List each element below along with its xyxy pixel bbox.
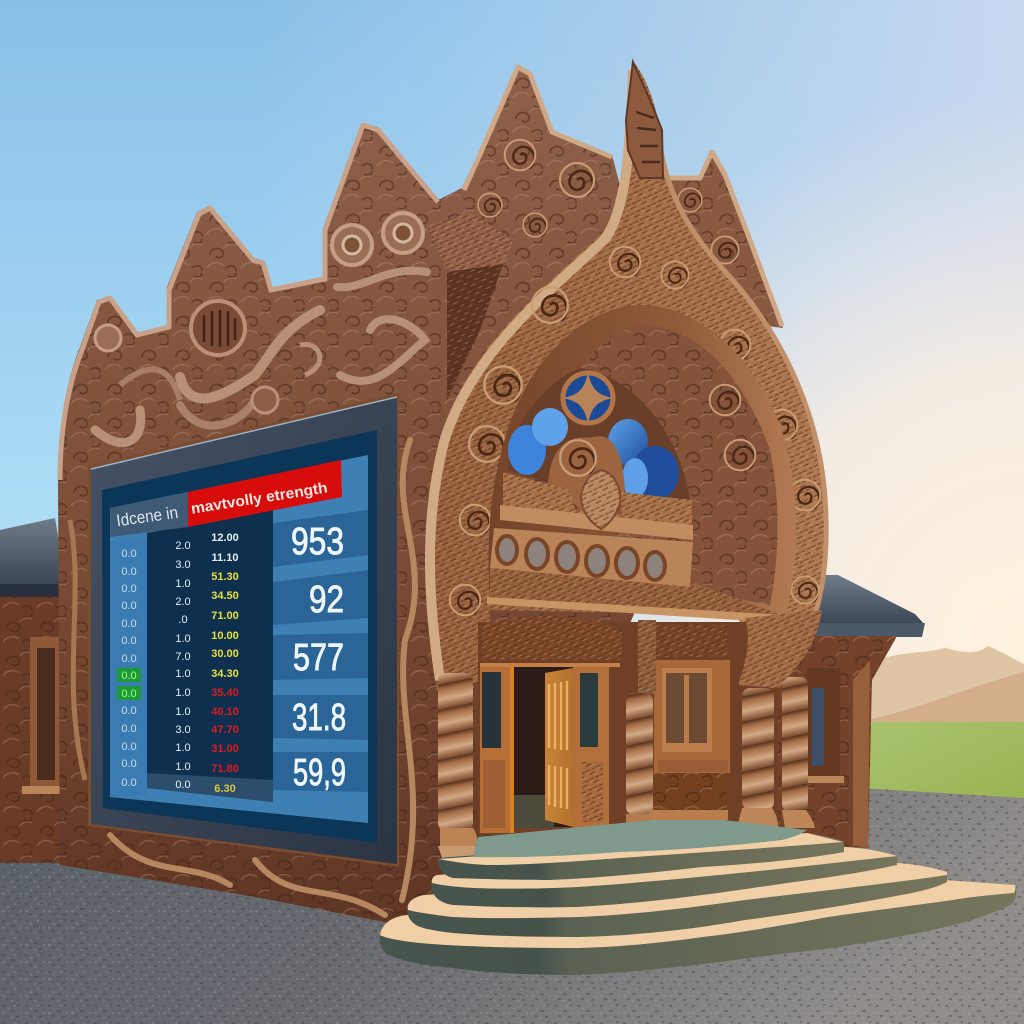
screen: second data column: 30.00 bbox=[211, 648, 239, 660]
background: grass field bbox=[862, 722, 1024, 799]
facade relief: medallions and ribbons bbox=[95, 213, 427, 443]
screen: second data column: 11.10 bbox=[212, 552, 238, 564]
arch: smooth left moulding bbox=[430, 70, 633, 680]
door: open leaf bbox=[545, 668, 573, 827]
screen: large values: 59,9 bbox=[293, 752, 346, 794]
screen: id column values: 0.0 bbox=[121, 653, 137, 665]
screen: id column values: 0.0 bbox=[121, 635, 137, 647]
screen: second data column: 35.40 bbox=[211, 687, 239, 699]
screen: second data column: 12.00 bbox=[211, 532, 239, 544]
twisted columns bbox=[438, 620, 815, 858]
central gable with swirls bbox=[464, 67, 612, 237]
screen: large values: 31.8 bbox=[292, 697, 346, 739]
screen: summary row bbox=[147, 773, 273, 802]
alcove interior bbox=[488, 305, 796, 618]
right gable bbox=[650, 150, 783, 328]
screen: inner dark edge bbox=[102, 430, 377, 843]
screen: id column values: 0.0 bbox=[121, 583, 137, 595]
right wing: roof bbox=[815, 575, 925, 637]
display screen bbox=[88, 393, 399, 867]
screen: second data column: 34.30 bbox=[211, 668, 239, 680]
screen: first data column: 1.0 bbox=[175, 687, 191, 699]
screen: red header bar: mavtvolly etrength bbox=[190, 479, 329, 518]
screen: first data column: 0.0 bbox=[175, 779, 191, 791]
great arch: carved ring bbox=[426, 60, 828, 690]
main carved facade bbox=[58, 65, 650, 925]
arch: right edge moulding bbox=[658, 130, 826, 686]
screen: large values: 953 bbox=[291, 521, 344, 563]
step: top tier bbox=[438, 833, 844, 880]
screen: id column values: 0.0 bbox=[121, 688, 137, 700]
screen: large values bbox=[291, 521, 346, 794]
door: left leaf bbox=[480, 667, 513, 833]
step: bottom tier bbox=[380, 880, 1016, 975]
screen: first data column: 1.0 bbox=[175, 706, 191, 718]
carved balcony bbox=[487, 472, 784, 623]
heart shield ornament bbox=[581, 470, 620, 529]
screen: bezel bbox=[88, 393, 399, 867]
screen: second data column: 6.30 bbox=[214, 783, 236, 795]
screen: id column values: 0.0 bbox=[121, 670, 137, 682]
screen: large values: 92 bbox=[309, 579, 344, 621]
screen: header cell bbox=[110, 492, 188, 537]
screen: second data column: 40.10 bbox=[211, 706, 239, 718]
screen: id column values: 0.0 bbox=[121, 741, 137, 753]
screen: id column values: 0.0 bbox=[121, 548, 137, 560]
screen: first data column: 1.0 bbox=[175, 742, 191, 754]
left wing: carved wall and window bbox=[0, 597, 70, 863]
carved tower capital bbox=[427, 212, 513, 400]
screen: second data column: 34.50 bbox=[211, 590, 239, 602]
screen: second data column: 10.00 bbox=[211, 630, 239, 642]
screen: right value blocks bbox=[273, 510, 368, 792]
screen: second data column: 71.80 bbox=[211, 763, 239, 775]
screen: blue panel bbox=[110, 455, 368, 823]
carved band below and beside screen bbox=[70, 440, 415, 915]
screen: first data column: 1.0 bbox=[175, 578, 191, 590]
entrance window bbox=[648, 660, 730, 820]
screen: first data column: 3.0 bbox=[175, 559, 191, 571]
column: right one bbox=[737, 688, 778, 827]
step: third tier bbox=[408, 863, 947, 937]
step: landing bbox=[474, 820, 807, 857]
screen: second data column: 71.00 bbox=[211, 610, 239, 622]
entrance steps bbox=[380, 820, 1016, 975]
column: centre bbox=[626, 620, 656, 830]
screen: first data column: 1.0 bbox=[175, 761, 191, 773]
screen: id column values: 0.0 bbox=[121, 600, 137, 612]
screen: id column values bbox=[117, 548, 141, 789]
background: distant mountains bbox=[866, 646, 1024, 724]
arch: spirals bbox=[450, 247, 820, 615]
screen: id column values: 0.0 bbox=[121, 758, 137, 770]
screen: header cell: Idcene in bbox=[115, 503, 179, 530]
screen: red header bar bbox=[188, 460, 342, 527]
facade: light roofline edge bbox=[60, 125, 438, 480]
screen: first data column: 1.0 bbox=[175, 668, 191, 680]
screen: id column values: 0.0 bbox=[121, 618, 137, 630]
screen: first data column: 1.0 bbox=[175, 633, 191, 645]
rose window: round tracery bbox=[563, 373, 613, 423]
column: far left bbox=[438, 673, 477, 858]
screen: dark data column bbox=[147, 510, 273, 802]
step: second tier bbox=[431, 847, 897, 907]
screen: second data column: 31.00 bbox=[211, 743, 239, 755]
screen: first data column: .0 bbox=[178, 614, 188, 626]
screen: second data column: 47.70 bbox=[211, 724, 239, 736]
screen: first data column: 2.0 bbox=[175, 596, 191, 608]
background: gravel ground bbox=[0, 788, 1024, 1024]
window: carved panel below bbox=[650, 773, 727, 813]
arch brace at right bbox=[738, 610, 822, 688]
entrance wall bbox=[478, 616, 778, 835]
left wing: roof bbox=[0, 518, 66, 598]
screen: first data column: 2.0 bbox=[175, 540, 191, 552]
screen: id column values: 0.0 bbox=[121, 723, 137, 735]
balcony spiral crest and shield bbox=[548, 436, 625, 528]
screen: id column values: 0.0 bbox=[121, 566, 137, 578]
right wing: carved wall bbox=[770, 636, 897, 848]
rose window with blue glass bbox=[508, 368, 690, 500]
screen: id column values: 0.0 bbox=[121, 705, 137, 717]
column: right two bbox=[782, 677, 815, 828]
arch: carved finial head bbox=[626, 62, 663, 178]
door: right panel bbox=[573, 667, 609, 833]
screen: second data column: 51.30 bbox=[211, 571, 239, 583]
screen: second data column bbox=[211, 532, 239, 795]
screen: first data column bbox=[175, 540, 191, 791]
screen: large values: 577 bbox=[293, 637, 344, 679]
screen: first data column: 3.0 bbox=[175, 724, 191, 736]
entrance door bbox=[480, 663, 620, 833]
screen: first data column: 7.0 bbox=[175, 651, 191, 663]
screen: id column values: 0.0 bbox=[121, 777, 137, 789]
door: dark interior bbox=[514, 667, 574, 827]
screen: left id column bbox=[110, 540, 147, 796]
balcony: oval windows bbox=[497, 536, 665, 580]
